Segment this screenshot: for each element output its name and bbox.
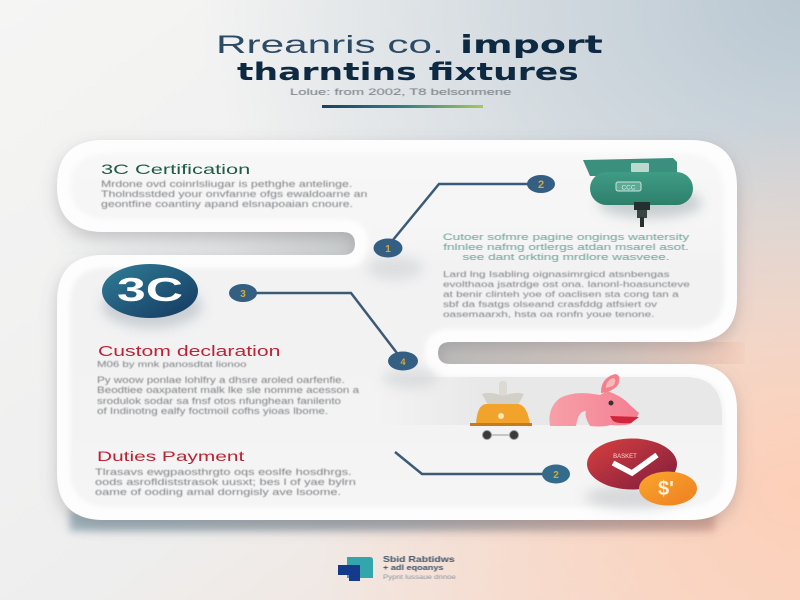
footer text: Sbid Rabtidws [383,555,455,564]
text: 3C certification body [100,179,368,210]
footer text [382,555,456,581]
icon: green certification device [583,158,702,227]
heading: 3C Certification: 3C Certification [101,161,250,177]
icon: pink pig [549,374,639,426]
title: import [460,30,603,59]
text: right panel body: oasemaarxh, hsta oa ronfn youe tenone. [443,309,654,319]
title: tharntins fixtures [237,58,579,86]
connector: duties payment line [395,452,570,484]
text: green description [442,232,690,262]
panel: inner surface [70,153,724,507]
footer text: + adl eqoanys [383,565,443,572]
text: duties payment body: oame of ooding amal dorngisly ave lsoome. [95,487,341,497]
text: 3C certification body: geontfine coantiny apand elsnapoaian cnoure. [101,199,353,209]
icon: orange cart [470,381,532,440]
text: custom declaration body: srodulok sodar sa fnsf otos nfunghean fanilento [97,396,341,406]
text: custom declaration body [96,375,360,417]
text: right panel body [442,269,690,320]
text: 3C certification body: Tholndsstded your onvfanne ofgs ewaldoarne an [101,189,367,199]
icon: green certification device: CCC [621,184,636,192]
text: green description: see dant orkting mrdlore wasveee. [462,252,670,262]
text: duties payment body [94,467,356,498]
icon: footer logo [338,557,373,581]
connector: node 1 to node 2: 1 [385,244,391,255]
text: green description: Cutoer sofmre pagine ongings wantersity [443,232,689,242]
panel: main white frame [57,140,737,520]
text: green description: fnlnlee nafmg ortlergs atdan msarel asot. [443,242,689,252]
text: duties payment body: Tlrasavs ewgpaosthrgto oqs eoslfe hosdhrgs. [95,467,352,477]
text: 3C certification body: Mrdone ovd coinrlsliugar is pethghe antelinge. [101,179,352,189]
connector: node 1 to node 2: 2 [538,179,544,191]
title [216,30,603,86]
text: right panel body: at benir clinteh yoe of oaclisen sta cong tan a [443,289,679,299]
connector: node 3 to node 4 [229,284,418,370]
connector: node 1 to node 2 [374,175,555,258]
text: right panel body: evolthaoa jsatrdge ost ona. lanonl-hoasuncteve [443,279,690,289]
panel: right slot [438,342,745,364]
text: custom declaration subtitle: M06 by mnk panosdtat lionoo [97,360,246,368]
footer text: Pypnt lussaue dnnoe [383,575,456,581]
icon: red approval badge and coin: BASKET [613,454,637,460]
icon: 3C badge [102,264,202,328]
title underline [322,105,483,108]
heading: Duties Payment: Duties Payment [97,448,244,464]
text: right panel body: sbf da fsatgs olseand crasfddg atfsiert ov [443,299,657,309]
icon: red approval badge and coin: $' [658,478,674,500]
icon: 3C badge: 3C [117,271,183,308]
text: custom declaration body: of Indinotng ealfy foctmoil cofhs yioas lbome. [97,406,328,416]
connector: node 3 to node 4: 4 [400,357,406,367]
text: custom declaration body: Py woow ponlae lohlfry a dhsre aroled oarfenfie. [97,375,345,385]
panel: left slot [57,232,355,255]
connector: node 3 to node 4: 3 [240,289,246,300]
text: custom declaration body: Beodtiee oaxpatent malk lke sle nomme acesson a [97,385,359,395]
title: Rreanris co. [216,31,444,59]
shadow: soft node shading [367,256,438,388]
subtitle: Lolue: from 2002, T8 belsonmene [290,87,511,98]
heading: Custom declaration: Custom declaration [98,344,280,360]
icon: red approval badge and coin [585,438,697,509]
connector: duties payment line: 2 [553,470,559,481]
text: duties payment body: oods asrofldiststrasok uusxt; bes l of yae bylrn [95,477,356,487]
panel: shaded band behind icons [380,377,722,425]
text: right panel body: Lard lng Isabling oignasimrgicd atsnbengas [443,269,669,279]
